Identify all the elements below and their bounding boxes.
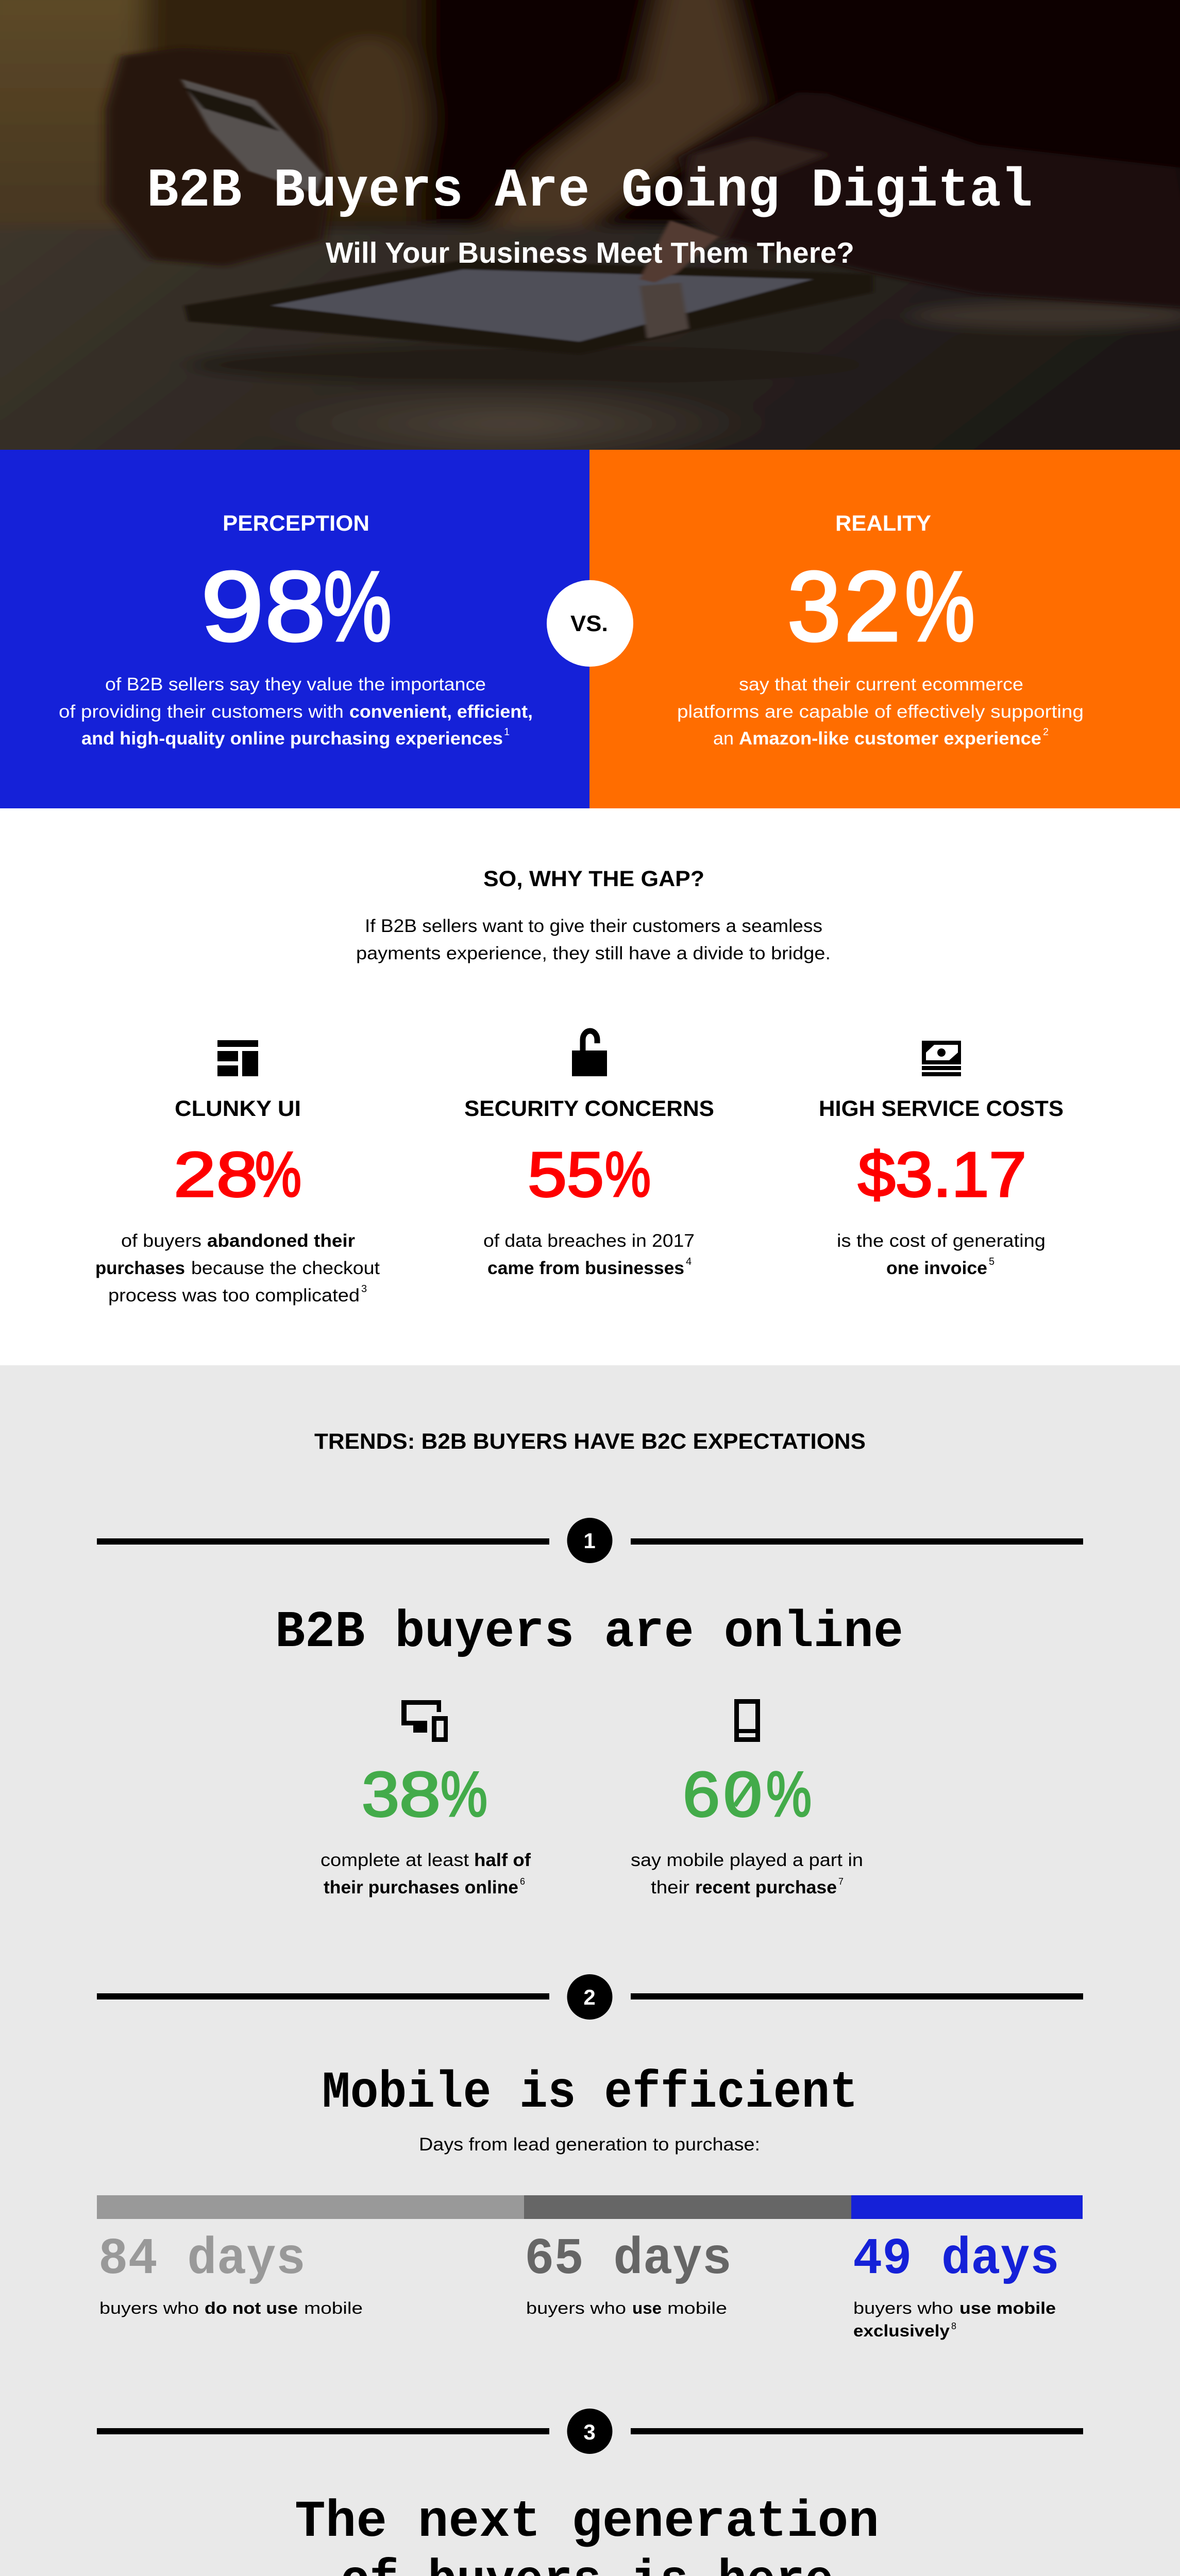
clunky UI description: abandoned their xyxy=(207,1231,355,1251)
38 percent number: % xyxy=(441,1759,487,1830)
perception stat: % xyxy=(324,551,392,662)
38 percent description: their purchases online xyxy=(324,1877,518,1897)
gap intro text: If B2B sellers want to give their customers a seamless xyxy=(365,916,822,936)
clunky UI description: of buyers xyxy=(121,1231,201,1251)
stat: 84 days: 84 days xyxy=(98,2231,306,2289)
section heading: online: B2B buyers are online xyxy=(275,1604,903,1662)
60 percent number xyxy=(683,1759,812,1830)
clunky UI description: because the checkout xyxy=(191,1258,380,1278)
hero background photo: hands with card and tablet xyxy=(0,0,1180,467)
49 days description: use mobile xyxy=(959,2299,1056,2317)
service costs description: one invoice xyxy=(886,1258,987,1278)
clunky UI stat: 2 xyxy=(174,1140,216,1210)
perception heading: PERCEPTION xyxy=(223,511,369,536)
reality description: Amazon-like customer experience xyxy=(739,728,1041,749)
section heading: mobile: Mobile is efficient xyxy=(322,2064,858,2123)
60 percent number: 6 xyxy=(683,1759,720,1830)
service costs description: is the cost of generating xyxy=(837,1231,1046,1251)
gap intro text xyxy=(356,916,831,963)
security description: came from businesses xyxy=(487,1258,684,1278)
icon: phone xyxy=(734,1699,760,1742)
84 days description: mobile xyxy=(304,2299,363,2317)
security description xyxy=(483,1231,695,1278)
60 percent description: say mobile played a part in xyxy=(631,1850,863,1870)
divider with number 3: 3 xyxy=(583,2420,596,2444)
service costs heading: HIGH SERVICE COSTS xyxy=(819,1096,1064,1121)
84 days description xyxy=(99,2299,363,2317)
60 percent description: recent purchase xyxy=(695,1877,837,1897)
60 percent description: 7 xyxy=(838,1876,844,1887)
hero title: B2B Buyers Are Going Digital xyxy=(147,160,1033,222)
60 percent number: % xyxy=(766,1759,812,1830)
stat: 49 days xyxy=(853,2231,1059,2340)
security description: of data breaches in 2017 xyxy=(483,1231,695,1251)
clunky UI description: purchases xyxy=(95,1258,185,1278)
perception description: of B2B sellers say they value the importance xyxy=(105,674,486,694)
84 days description: buyers who xyxy=(99,2299,199,2317)
column: clunky UI xyxy=(95,1040,380,1306)
stat: 38 percent xyxy=(321,1700,531,1897)
clunky UI stat: 8 xyxy=(216,1140,258,1210)
badge: vs circle xyxy=(547,580,633,667)
49 days description: buyers who xyxy=(853,2299,953,2317)
38 percent description: complete at least xyxy=(321,1850,469,1870)
38 percent description: 6 xyxy=(520,1876,525,1887)
65 days description xyxy=(526,2299,727,2317)
reality stat: 3 xyxy=(787,551,841,662)
stat: 84 days xyxy=(98,2231,363,2317)
perception description: of providing their customers with xyxy=(59,702,344,722)
security stat: % xyxy=(605,1140,651,1210)
reality stat: 2 xyxy=(844,551,901,662)
hero subtitle: Will Your Business Meet Them There? xyxy=(326,236,854,269)
panel: perception xyxy=(0,450,589,808)
clunky UI stat: % xyxy=(255,1140,301,1210)
panel: trends xyxy=(0,1365,1180,2576)
divider with number 1 xyxy=(97,1518,1083,1563)
panel: why the gap xyxy=(0,808,1180,1365)
column: security concerns xyxy=(464,1031,714,1278)
security stat: 5 xyxy=(528,1140,567,1210)
49 days description: 8 xyxy=(951,2321,956,2331)
security stat: 5 xyxy=(567,1140,604,1210)
38 percent number: 3 xyxy=(362,1759,399,1830)
panel: hero photo header xyxy=(0,0,1180,467)
service costs description: 5 xyxy=(989,1256,994,1267)
reality description: an xyxy=(713,728,734,749)
stat: 65 days: 65 days xyxy=(525,2231,732,2289)
days caption: Days from lead generation to purchase: xyxy=(419,2134,760,2155)
service costs stat: $3.17 xyxy=(858,1140,1026,1210)
60 percent number: 0 xyxy=(723,1759,762,1830)
icon: cash stack xyxy=(922,1041,961,1076)
security description: 4 xyxy=(686,1256,692,1267)
38 percent number: 8 xyxy=(399,1759,441,1830)
section heading: next generation: The next generation xyxy=(295,2494,879,2552)
bar chart: days to purchase xyxy=(97,2195,1083,2219)
60 percent description: their xyxy=(651,1877,689,1897)
65 days description: mobile xyxy=(667,2299,727,2317)
reality description: say that their current ecommerce xyxy=(739,674,1023,694)
icon: open padlock xyxy=(572,1031,607,1076)
reality stat: % xyxy=(905,551,975,662)
icon: devices xyxy=(401,1700,448,1742)
perception description: convenient, efficient, xyxy=(349,702,533,722)
divider with number 2: 2 xyxy=(583,1985,596,2009)
column: high service costs xyxy=(819,1041,1064,1278)
perception stat: 8 xyxy=(265,551,326,662)
trends heading: TRENDS: B2B BUYERS HAVE B2C EXPECTATIONS xyxy=(314,1429,866,1454)
65 days description: use xyxy=(632,2299,662,2317)
divider with number 3 xyxy=(97,2409,1083,2454)
badge: vs circle: VS. xyxy=(570,611,608,636)
38 percent description xyxy=(321,1850,531,1897)
icon: page layout xyxy=(217,1040,258,1076)
65 days description: buyers who xyxy=(526,2299,626,2317)
service costs description xyxy=(837,1231,1046,1278)
perception description xyxy=(59,674,533,749)
reality description xyxy=(677,674,1084,749)
clunky UI description: process was too complicated xyxy=(108,1285,360,1306)
stat: 65 days xyxy=(525,2231,732,2317)
gap intro text: payments experience, they still have a divide to bridge. xyxy=(356,943,831,963)
stat: 49 days: 49 days xyxy=(853,2231,1059,2289)
49 days description: exclusively xyxy=(853,2321,950,2340)
panel: reality xyxy=(589,450,1180,808)
60 percent description xyxy=(631,1850,863,1897)
perception description: and high-quality online purchasing experiences xyxy=(81,728,503,749)
clunky UI heading: CLUNKY UI xyxy=(175,1096,301,1121)
clunky UI description xyxy=(95,1231,380,1306)
gap heading: SO, WHY THE GAP? xyxy=(483,867,704,891)
divider with number 1: 1 xyxy=(583,1529,596,1553)
perception stat: 9 xyxy=(201,551,264,662)
divider with number 2 xyxy=(97,1974,1083,2020)
perception description: 1 xyxy=(504,726,510,738)
49 days description xyxy=(853,2299,1056,2340)
reality description: 2 xyxy=(1043,726,1049,738)
reality description: platforms are capable of effectively supporting xyxy=(677,702,1084,722)
reality heading: REALITY xyxy=(835,511,931,536)
stat: 60 percent xyxy=(631,1699,863,1897)
clunky UI description: 3 xyxy=(361,1283,367,1295)
38 percent description: half of xyxy=(474,1850,531,1870)
security heading: SECURITY CONCERNS xyxy=(464,1096,714,1121)
84 days description: do not use xyxy=(205,2299,298,2317)
